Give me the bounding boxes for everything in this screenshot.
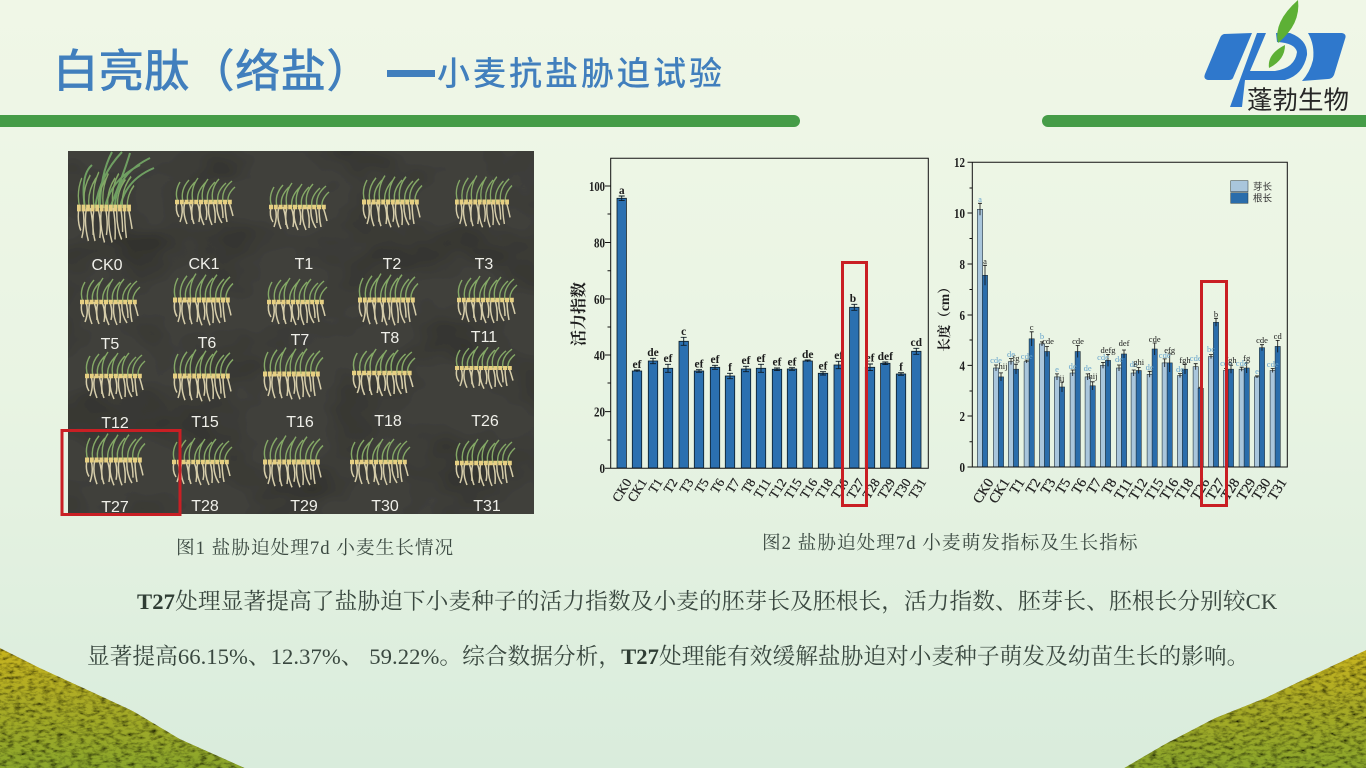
vigor x axis labels: T6 [707,475,728,496]
vigor significance letters: de [802,349,813,361]
vigor x axis labels: T31 [905,476,929,501]
vigor x axis labels: T26 [828,475,852,501]
vigor significance letters: ef [866,352,875,364]
vigor x axis labels: T7 [722,475,743,496]
left green title rule [0,115,800,127]
length x axis labels: T30 [1250,476,1274,503]
vigor significance letters: c [681,326,686,338]
length x axis labels: T27 [1204,476,1228,503]
length x axis labels: T12 [1127,476,1151,503]
length x axis labels: CK0 [971,476,997,507]
root significance letters: hij [1089,371,1097,381]
logo text: 蓬勃生物 [1247,87,1349,115]
right green title rule [1042,115,1366,127]
photo treatment labels: T29 [290,498,318,515]
length x axis labels [971,476,1290,507]
root significance letters: fgh [1179,355,1191,365]
shoot significance letters: b [1040,331,1044,341]
vigor x axis labels: T15 [781,476,805,501]
vigor x axis labels: T27 [843,475,867,501]
root significance letters: ghi [1133,357,1145,367]
shoot length bars [977,209,1275,467]
vigor frame and ticks [605,158,928,468]
photo treatment labels: T15 [191,414,219,431]
vigor significance letters: cd [911,337,923,349]
vigor x axis labels: T12 [766,476,790,501]
photo treatment labels: CK0 [91,257,123,274]
vigor significance letters: ef [773,356,782,368]
seedling rows [77,172,517,487]
root significance letters: c [1030,322,1034,332]
vigor x axis labels: T16 [797,475,821,501]
length x axis labels: T26 [1189,476,1213,503]
caption: figure 2: 图2 盐胁迫处理7d 小麦萌发指标及生长指标 [762,533,1138,554]
title sub part: 小麦抗盐胁迫试验 [437,55,725,92]
length y axis labels: 10 [954,207,965,222]
length y axis labels: 8 [960,258,965,273]
length y axis labels: 0 [960,461,965,476]
legend: 芽长 [1253,181,1272,193]
photo treatment labels: T1 [295,256,313,273]
shoot significance letters: bc [1207,344,1215,354]
length x axis labels: T7 [1084,476,1105,497]
photo treatment labels: T18 [374,413,402,430]
vigor error bars [619,196,919,379]
photo treatment labels: T27 [101,499,129,516]
length y axis labels: 6 [960,309,965,324]
root significance letters: ij [1060,373,1064,383]
photo treatment labels: T30 [371,498,399,515]
root significance letters: cd [1274,331,1282,341]
vigor x axis labels: T8 [738,476,759,496]
photo treatment labels: CK1 [188,256,220,273]
shoot significance letters: cde [1097,352,1109,362]
root significance letters: fg [1243,353,1251,363]
right grass hill [1124,650,1366,768]
vigor significance letters [619,185,923,374]
root significance letters [983,256,1282,383]
root significance letters: b [1214,309,1218,319]
body text line 2: 显著提高66.15%、12.37%、 59.22%。综合数据分析，T27处理能有效缓解盐胁迫对小麦种子萌发及幼苗生长的影响。 [87,644,1249,669]
length x axis labels: T31 [1266,476,1290,503]
vigor significance letters: ef [742,355,751,367]
length x axis labels: T28 [1219,476,1243,503]
logo: p stem and bowl [1230,33,1307,107]
photo treatment labels: T11 [471,329,497,346]
photo treatment labels: T6 [198,335,216,352]
vigor y axis labels: 100 [589,179,605,194]
photo treatment labels [91,256,501,516]
vigor x axis labels: T2 [660,476,681,496]
vigor significance letters: ef [834,350,843,362]
left grass hill [0,648,245,768]
shoot significance letters: de [1069,361,1077,371]
vigor x axis labels: T3 [676,476,697,496]
shoot significance letters: cde [990,355,1002,365]
length error bars [978,203,1280,392]
vigor significance letters: ef [695,358,704,370]
title dash [387,70,435,77]
vigor significance letters: ef [633,359,642,371]
vigor y axis labels: 0 [600,461,605,476]
shoot significance letters: de [1176,364,1184,374]
logo: right blue block [1302,33,1346,81]
vigor x axis labels: T28 [859,476,883,501]
length x axis labels: T18 [1173,476,1197,503]
caption: figure 1: 图1 盐胁迫处理7d 小麦生长情况 [176,538,454,559]
length x axis labels: T11 [1112,476,1136,503]
length x axis labels: T6 [1069,476,1090,497]
root significance letters: fg [1012,353,1020,363]
vigor highlight box [842,262,866,506]
body text line 1: T27处理显著提高了盐胁迫下小麦种子的活力指数及小麦的胚芽长及胚根长，活力指数、胚芽长、胚根长分别较CK [137,589,1277,614]
vigor x axis labels: CK1 [624,476,650,504]
vigor y axis labels: 20 [594,405,605,420]
shoot significance letters: de [1130,359,1138,369]
length x axis labels: T8 [1099,476,1120,497]
photo treatment labels: T12 [101,415,129,432]
root significance letters: cde [1072,336,1084,346]
length y axis title: 长度（cm） [936,280,952,352]
vigor y axis labels: 80 [594,236,605,250]
length x axis labels: T15 [1143,476,1167,503]
shoot significance letters: cde [1021,351,1033,361]
vigor significance letters: ef [711,354,720,366]
vigor x axis labels: T29 [874,476,898,501]
photo treatment labels: T3 [475,256,493,273]
vigor significance letters: a [619,185,625,197]
vigor y axis title: 活力指数 [569,282,588,346]
root significance letters: defg [1100,345,1116,355]
length y axis labels: 2 [960,410,965,425]
photo highlight box [62,430,180,514]
shoot significance letters [978,194,1279,376]
tall seedling shoots of CK0 [84,152,154,208]
photo treatment labels: T8 [381,330,399,347]
vigor significance letters: def [878,351,893,363]
length x axis labels: T5 [1053,476,1074,497]
legend: 根长 [1253,192,1272,204]
photo treatment labels: T5 [101,336,119,353]
shoot significance letters: cde [1190,353,1202,363]
length x axis labels: T3 [1038,476,1059,497]
logo: green leaf lower [1269,45,1285,68]
vigor significance letters: ef [664,353,673,365]
shoot significance letters: de [1146,362,1154,372]
photo treatment labels: T16 [286,414,314,431]
root significance letters: efg [1164,345,1176,355]
shoot significance letters: e [1255,366,1259,376]
length y axis labels: 4 [960,359,965,374]
root significance letters: hij [999,361,1007,371]
title main part: 白亮肽（络盐） [53,46,372,97]
root significance letters: cde [1256,335,1268,345]
vigor x axis labels: CK0 [609,476,635,504]
vigor x axis labels: T1 [645,476,666,496]
vigor x axis labels: T30 [890,476,914,501]
vigor x axis labels [609,475,929,504]
photo treatment labels: T31 [473,498,501,515]
legend [1231,181,1272,204]
vigor x axis labels: T11 [750,476,774,501]
logo: green leaf upper [1277,0,1298,43]
root significance letters: cde [1042,336,1054,346]
shoot significance letters: cde [1267,359,1279,369]
photo treatment labels: T26 [471,413,499,430]
photo treatment labels: T7 [291,332,309,349]
vigor y axis labels: 60 [594,292,605,307]
logo: left blue block [1204,33,1252,80]
shoot significance letters: cde [1236,358,1248,368]
root significance letters: def [1119,338,1130,348]
shoot significance letters: de [1007,349,1015,359]
shoot significance letters: cde [1220,358,1232,368]
title [53,46,725,97]
vigor significance letters: f [728,362,732,374]
vigor significance letters: ef [757,353,766,365]
length y axis labels: 12 [954,156,965,171]
shoot significance letters: de [1115,354,1123,364]
length x axis labels: T29 [1235,476,1259,503]
photo treatment labels: T2 [383,256,401,273]
shoot significance letters: e [1055,364,1059,374]
shoot significance letters: a [978,194,982,204]
length x axis labels: CK1 [987,476,1013,507]
length x axis labels: T1 [1007,476,1028,497]
length x axis labels: T2 [1023,476,1044,497]
shoot significance letters: cde [1159,350,1171,360]
vigor x axis labels: T18 [812,476,836,501]
root significance letters: cde [1149,334,1161,344]
vigor significance letters: f [899,362,903,374]
length y axis labels [954,156,965,476]
length x axis labels: T16 [1158,476,1182,503]
vigor y axis labels [589,179,605,476]
length highlight box [1202,282,1226,506]
root significance letters: a [983,256,987,266]
root length bars [982,275,1280,467]
vigor significance letters: de [647,347,659,359]
vigor significance letters: b [850,293,856,305]
root significance letters: fgh [1225,355,1237,365]
vigor significance letters: ef [819,360,828,372]
photo treatment labels: T28 [191,498,219,515]
vigor significance letters: ef [788,356,797,368]
vigor y axis labels: 40 [594,348,605,363]
vigor bars [617,198,921,468]
vigor x axis labels: T5 [691,476,712,496]
length frame and ticks [968,162,1287,467]
shoot significance letters: de [1084,363,1092,373]
